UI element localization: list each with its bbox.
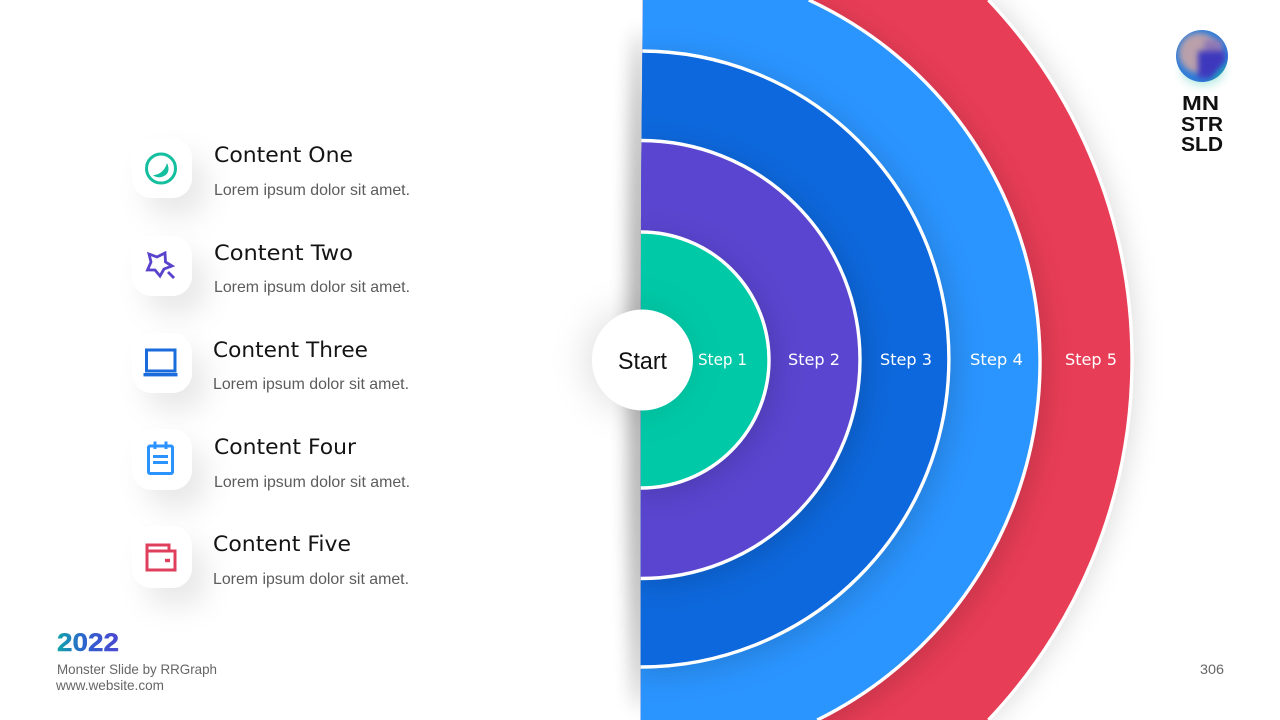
icon: notepad xyxy=(148,442,172,474)
label: step 5: Step 5 xyxy=(1065,350,1117,369)
concentric steps diagram xyxy=(630,0,1132,720)
label: step 4: Step 4 xyxy=(970,350,1023,369)
item: content two xyxy=(132,236,410,296)
item: content two: Content Two xyxy=(214,241,353,265)
icon: moon circle xyxy=(146,154,176,183)
item: content five: Content Five xyxy=(213,532,351,556)
item: content one xyxy=(132,138,410,199)
item: content three: Content Three xyxy=(213,338,368,362)
item: content four: Lorem ipsum dolor sit amet. xyxy=(214,474,410,491)
label: step 3: Step 3 xyxy=(880,350,932,369)
logo orb xyxy=(1176,30,1230,85)
label: step 1: Step 1 xyxy=(698,350,747,369)
label: step 2: Step 2 xyxy=(788,350,840,369)
item: content five xyxy=(132,526,409,588)
credit: Monster Slide by RRGraph xyxy=(57,661,217,677)
start circle xyxy=(592,310,693,410)
item: content two: Lorem ipsum dolor sit amet. xyxy=(214,279,410,296)
logo xyxy=(1176,30,1230,156)
ring: step 5 xyxy=(630,0,1132,720)
icon: magic star xyxy=(148,253,174,278)
logo text: SLD xyxy=(1181,134,1223,156)
page number: 306 xyxy=(1200,661,1224,677)
logo text xyxy=(1181,93,1224,156)
website: www.website.com xyxy=(55,677,164,693)
ring: step 1 xyxy=(630,232,769,488)
ring: step 2 xyxy=(630,140,860,578)
item: content three xyxy=(132,333,409,393)
item: content one: Lorem ipsum dolor sit amet. xyxy=(214,182,410,199)
icon: wallet xyxy=(147,545,175,570)
footer xyxy=(55,629,217,693)
logo text: MN xyxy=(1182,93,1219,115)
ring: step 4 xyxy=(630,0,1040,720)
logo text: STR xyxy=(1181,114,1224,136)
item: content one: Content One xyxy=(214,143,353,167)
year: 2022 xyxy=(57,629,119,657)
item: content three: Lorem ipsum dolor sit amet. xyxy=(213,376,409,393)
ring: step 3 xyxy=(630,51,949,667)
item: content five: Lorem ipsum dolor sit amet. xyxy=(213,571,409,588)
item: content four xyxy=(132,429,410,491)
item: content four: Content Four xyxy=(214,435,356,459)
left edge shadow of semicircles xyxy=(631,30,649,710)
icon: laptop xyxy=(144,350,178,376)
start circle: Start xyxy=(618,348,667,375)
